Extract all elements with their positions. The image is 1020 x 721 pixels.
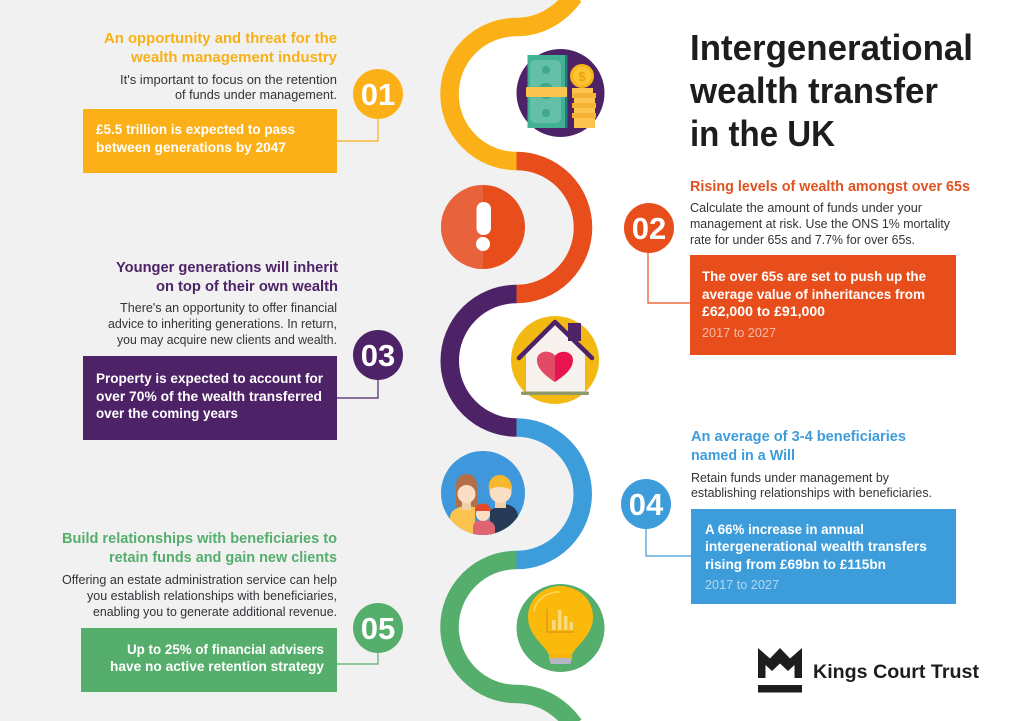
heading 02: Rising levels of wealth amongst over 65s xyxy=(690,179,970,195)
callout box 03: over the coming years xyxy=(96,406,238,421)
connector 02 xyxy=(648,252,690,303)
callout box 03 xyxy=(83,356,337,440)
number badge 04 xyxy=(621,479,671,529)
logo: Kings Court Trust xyxy=(758,648,980,692)
number badge 02: 02 xyxy=(632,211,666,246)
winding ribbon xyxy=(449,0,583,721)
body text 03: you may acquire new clients and wealth. xyxy=(117,333,337,347)
number badge 01 xyxy=(353,69,403,119)
body text 01: of funds under management. xyxy=(175,88,337,102)
title: in the UK xyxy=(690,113,835,154)
heading 04: named in a Will xyxy=(691,448,795,464)
heading 04: An average of 3-4 beneficiaries xyxy=(691,429,906,445)
heading 05: Build relationships with beneficiaries to xyxy=(62,531,337,547)
body text 04 xyxy=(691,471,932,500)
heading 05 xyxy=(62,531,337,566)
callout box 03: over 70% of the wealth transferred xyxy=(96,389,322,404)
body text 01 xyxy=(120,73,337,102)
body text 04: Retain funds under management by xyxy=(691,471,890,485)
body text 02: management at risk. Use the ONS 1% mortality xyxy=(690,217,951,231)
callout box 05 xyxy=(81,628,337,692)
icon: family xyxy=(441,451,525,540)
body text 01: It's important to focus on the retention xyxy=(120,73,337,87)
callout box 04: intergenerational wealth transfers xyxy=(705,539,927,554)
callout box 01: between generations by 2047 xyxy=(96,140,286,155)
callout box 03: Property is expected to account for xyxy=(96,371,324,386)
logo wordmark: Kings Court Trust xyxy=(813,661,980,683)
icon: house with heart xyxy=(511,316,599,404)
number badge 03 xyxy=(353,330,403,380)
callout box 04 xyxy=(691,509,956,604)
callout box 02: 2017 to 2027 xyxy=(702,326,776,340)
panel: 05 build relationships xyxy=(62,531,403,692)
body text 05: enabling you to generate additional revenue. xyxy=(93,605,337,619)
callout box 01: £5.5 trillion is expected to pass xyxy=(96,122,295,137)
callout box 04: A 66% increase in annual xyxy=(705,522,864,537)
icon: money and coins xyxy=(516,49,604,137)
body text 03: There's an opportunity to offer financial xyxy=(120,301,337,315)
ribbon: blue segment xyxy=(516,428,583,560)
number badge 05: 05 xyxy=(361,611,395,646)
heading 01: wealth management industry xyxy=(130,50,337,66)
callout box 02: average value of inheritances from xyxy=(702,287,925,302)
callout box 02: £62,000 to £91,000 xyxy=(702,304,825,319)
body text 02 xyxy=(690,201,951,247)
body text 03: advice to inheriting generations. In return, xyxy=(108,317,337,331)
number badge 01: 01 xyxy=(361,77,395,112)
icon: light bulb with chart xyxy=(516,584,604,672)
connector 01 xyxy=(337,119,378,141)
callout box 01 xyxy=(83,109,337,173)
callout box 04: 2017 to 2027 xyxy=(705,578,779,592)
body text 05 xyxy=(62,573,337,619)
body text 02: rate for under 65s and 7.7% for over 65s. xyxy=(690,233,915,247)
icon: crown xyxy=(758,648,802,692)
title xyxy=(689,27,973,154)
number badge 05 xyxy=(353,603,403,653)
number badge 02 xyxy=(624,203,674,253)
callout box 02: The over 65s are set to push up the xyxy=(702,269,926,284)
callout box 04: rising from £69bn to £115bn xyxy=(705,557,886,572)
panel: 01 opportunity and threat xyxy=(83,31,403,173)
ribbon: green segment xyxy=(449,560,574,721)
heading 05: retain funds and gain new clients xyxy=(109,550,337,566)
heading 03: on top of their own wealth xyxy=(156,279,338,295)
ribbon: yellow segment xyxy=(449,0,574,161)
connector 05 xyxy=(337,652,378,664)
ribbon: red segment xyxy=(516,161,583,294)
connector 03 xyxy=(337,379,378,398)
icon: money and coins: $ xyxy=(578,69,586,84)
title: wealth transfer xyxy=(689,70,938,111)
body text 04: establishing relationships with beneficiaries. xyxy=(691,486,932,500)
body text 03 xyxy=(108,301,337,347)
heading 03: Younger generations will inherit xyxy=(116,260,338,276)
heading 04 xyxy=(691,429,906,464)
heading 01: An opportunity and threat for the xyxy=(104,31,337,47)
callout box 05: have no active retention strategy xyxy=(110,659,324,674)
panel: 02 rising levels of wealth xyxy=(624,179,970,355)
title: Intergenerational xyxy=(690,27,973,68)
number badge 04: 04 xyxy=(629,487,664,522)
callout box 05: Up to 25% of financial advisers xyxy=(127,642,324,657)
grey left background xyxy=(0,0,583,721)
callout box 02 xyxy=(690,255,956,355)
body text 05: you establish relationships with beneficiaries, xyxy=(87,589,337,603)
heading 01 xyxy=(104,31,337,66)
connector 04 xyxy=(646,528,691,556)
body text 05: Offering an estate administration service can help xyxy=(62,573,337,587)
panel: 03 younger generations xyxy=(83,260,403,440)
icon: warning exclamation xyxy=(441,185,525,269)
number badge 03: 03 xyxy=(361,338,395,373)
panel: 04 beneficiaries xyxy=(621,429,956,604)
heading 03 xyxy=(116,260,338,295)
body text 02: Calculate the amount of funds under your xyxy=(690,201,922,215)
ribbon: purple segment xyxy=(450,294,516,428)
